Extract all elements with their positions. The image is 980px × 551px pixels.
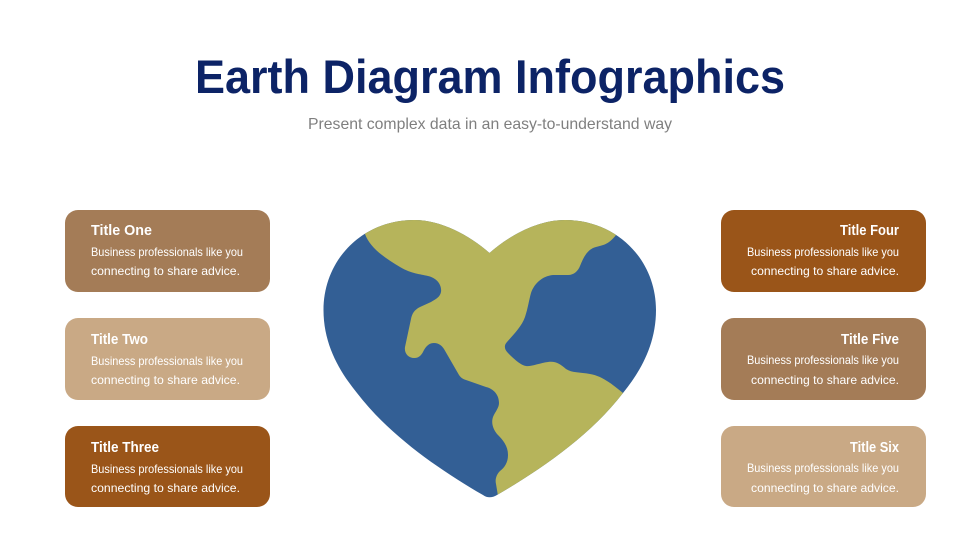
card: Title Six — [721, 426, 926, 507]
card: Title Four: Title Four — [840, 223, 899, 239]
card: Title One — [65, 210, 270, 292]
card: Title Five — [721, 318, 926, 400]
icon: heart-shaped earth — [324, 220, 656, 498]
card: Title Six: Title Six — [850, 440, 899, 456]
card: Title One: Business professionals like you — [91, 246, 243, 259]
card: Title Four — [721, 210, 926, 292]
card: Title Five: Business professionals like you — [747, 354, 899, 367]
card: Title Three: Title Three — [91, 440, 159, 456]
card: Title Six: connecting to share advice. — [751, 482, 899, 495]
card: Title Four: Business professionals like you — [747, 246, 899, 259]
title: Earth Diagram Infographics — [195, 50, 785, 103]
card: Title Five: connecting to share advice. — [751, 374, 899, 387]
card: Title Three: connecting to share advice. — [91, 482, 240, 495]
subtitle: Present complex data in an easy-to-understand way — [308, 116, 672, 133]
card: Title Two — [65, 318, 270, 400]
card: Title Three — [65, 426, 270, 507]
card: Title One: connecting to share advice. — [91, 265, 240, 278]
card: Title Two: Title Two — [91, 332, 148, 348]
card: Title Two: Business professionals like you — [91, 355, 243, 368]
card: Title Four: connecting to share advice. — [751, 265, 899, 278]
card: Title Six: Business professionals like you — [747, 462, 899, 475]
card: Title Three: Business professionals like you — [91, 463, 243, 476]
card: Title One: Title One — [91, 223, 152, 239]
card: Title Two: connecting to share advice. — [91, 374, 240, 387]
card: Title Five: Title Five — [841, 332, 899, 348]
